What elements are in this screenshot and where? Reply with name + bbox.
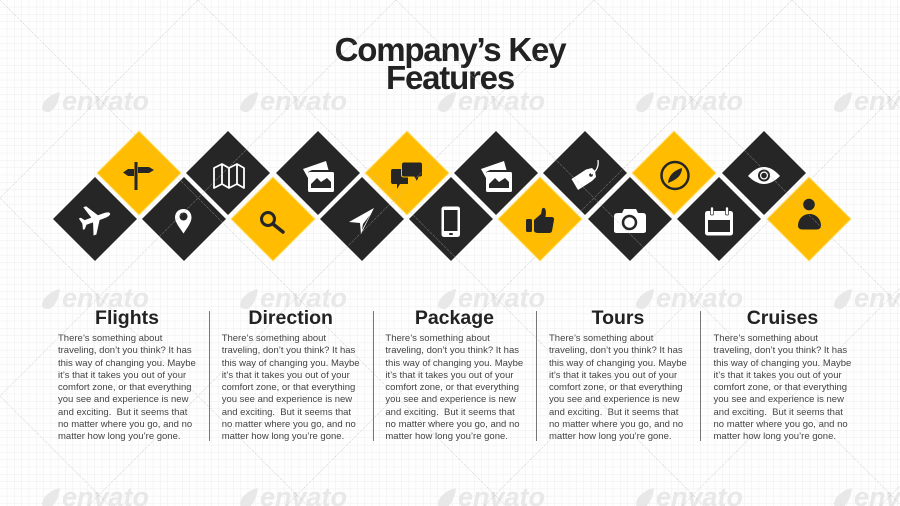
- text block: Tours: and exciting. But it seems that: [549, 407, 678, 418]
- heading: Direction: Direction: [248, 307, 333, 329]
- text block: Cruises: it’s that it takes you out of your: [714, 370, 842, 381]
- text block: Flights: you see and experience is new: [58, 394, 188, 405]
- text block: Tours: There’s something about: [549, 333, 653, 344]
- text block: Package: [385, 333, 523, 442]
- background grid and watermarks: envato: [458, 283, 545, 313]
- diamond: price tag: [543, 131, 627, 215]
- text block: Tours: [549, 333, 687, 442]
- text block: Direction: There’s something about: [222, 333, 326, 344]
- diamond: smartphone: [409, 177, 493, 261]
- diamond: plane: [53, 177, 137, 261]
- background grid and watermarks: envato: [458, 86, 545, 116]
- background grid and watermarks: envato: [62, 283, 149, 313]
- column: Flights: [58, 307, 196, 442]
- column: Cruises: [714, 307, 851, 442]
- heading: Cruises: Cruises: [747, 307, 818, 329]
- text block: Flights: matter how long you’re gone.: [58, 431, 181, 442]
- text block: Flights: [58, 333, 196, 442]
- diamond: navigation arrow: [320, 177, 404, 261]
- diamond: eye: [722, 131, 806, 215]
- heading: Tours: Tours: [592, 307, 644, 329]
- text block: Tours: you see and experience is new: [549, 394, 679, 405]
- text block: Cruises: comfort zone, or that everything: [714, 382, 847, 393]
- text block: Cruises: traveling, don’t you think? It has: [714, 345, 847, 356]
- text block: Flights: this way of changing you. Maybe: [58, 358, 196, 369]
- diamond: compass: [632, 131, 716, 215]
- text block: Cruises: and exciting. But it seems that: [714, 407, 843, 418]
- column: Package: [385, 307, 523, 442]
- diamond: camera: [588, 177, 672, 261]
- text block: Direction: it’s that it takes you out of your: [222, 370, 350, 381]
- text block: Direction: [222, 333, 360, 442]
- background grid and watermarks: envato: [62, 86, 149, 116]
- diamond: map: [186, 131, 270, 215]
- text block: Direction: matter how long you’re gone.: [222, 431, 344, 442]
- background grid and watermarks: envato: [260, 283, 347, 313]
- text block: Package: There’s something about: [385, 333, 490, 344]
- background grid and watermarks: envato: [656, 283, 743, 313]
- text block: Package: traveling, don’t you think? It has: [385, 345, 519, 356]
- text block: Flights: and exciting. But it seems that: [58, 407, 187, 418]
- column: Tours: [549, 307, 687, 442]
- title: Features: [386, 59, 514, 96]
- diamond: calendar: [677, 177, 761, 261]
- text block: Tours: it’s that it takes you out of your: [549, 370, 677, 381]
- text block: Tours: traveling, don’t you think? It has: [549, 345, 683, 356]
- heading: Package: Package: [415, 307, 494, 329]
- text block: Flights: There’s something about: [58, 333, 162, 344]
- text block: Package: no matter where you go, and no: [385, 419, 520, 430]
- text block: Direction: and exciting. But it seems that: [222, 407, 351, 418]
- text block: Package: and exciting. But it seems that: [385, 407, 515, 418]
- text block: Package: comfort zone, or that everything: [385, 382, 519, 393]
- text block: Direction: comfort zone, or that everything: [222, 382, 355, 393]
- text block: Tours: matter how long you’re gone.: [549, 431, 672, 442]
- text block: Cruises: no matter where you go, and no: [714, 419, 848, 430]
- diamond: chat bubbles: [365, 131, 449, 215]
- column: Direction: [222, 307, 360, 442]
- text block: Cruises: you see and experience is new: [714, 394, 844, 405]
- text block: Direction: traveling, don’t you think? It has: [222, 345, 355, 356]
- text block: Direction: this way of changing you. Maybe: [222, 358, 360, 369]
- text block: Cruises: this way of changing you. Maybe: [714, 358, 851, 369]
- text block: Cruises: There’s something about: [714, 333, 818, 344]
- text block: Direction: you see and experience is new: [222, 394, 352, 405]
- title: [335, 31, 566, 96]
- text block: Tours: this way of changing you. Maybe: [549, 358, 687, 369]
- text block: Package: matter how long you’re gone.: [385, 431, 508, 442]
- background grid and watermarks: envato: [656, 86, 743, 116]
- text block: Flights: traveling, don’t you think? It has: [58, 345, 192, 356]
- text block: Tours: no matter where you go, and no: [549, 419, 683, 430]
- text block: Flights: comfort zone, or that everything: [58, 382, 192, 393]
- diamond: location pin: [142, 177, 226, 261]
- text block: Tours: comfort zone, or that everything: [549, 382, 683, 393]
- diamond: search: [231, 177, 315, 261]
- heading: Flights: Flights: [95, 307, 159, 329]
- diamond: person: [767, 177, 851, 261]
- text block: Cruises: matter how long you’re gone.: [714, 431, 836, 442]
- text block: Flights: it’s that it takes you out of your: [58, 370, 186, 381]
- text block: Direction: no matter where you go, and no: [222, 419, 356, 430]
- diamond: signpost: [97, 131, 181, 215]
- title: Company’s Key: [335, 31, 565, 68]
- text block: Flights: no matter where you go, and no: [58, 419, 192, 430]
- text block: Package: this way of changing you. Maybe: [385, 358, 523, 369]
- text block: Cruises: [714, 333, 851, 442]
- text block: Package: it’s that it takes you out of your: [385, 370, 514, 381]
- diamond: thumbs up: [498, 177, 582, 261]
- diamond: photos 2: [454, 131, 538, 215]
- diamond: photos: [276, 131, 360, 215]
- text block: Package: you see and experience is new: [385, 394, 516, 405]
- background grid and watermarks: envato: [260, 86, 347, 116]
